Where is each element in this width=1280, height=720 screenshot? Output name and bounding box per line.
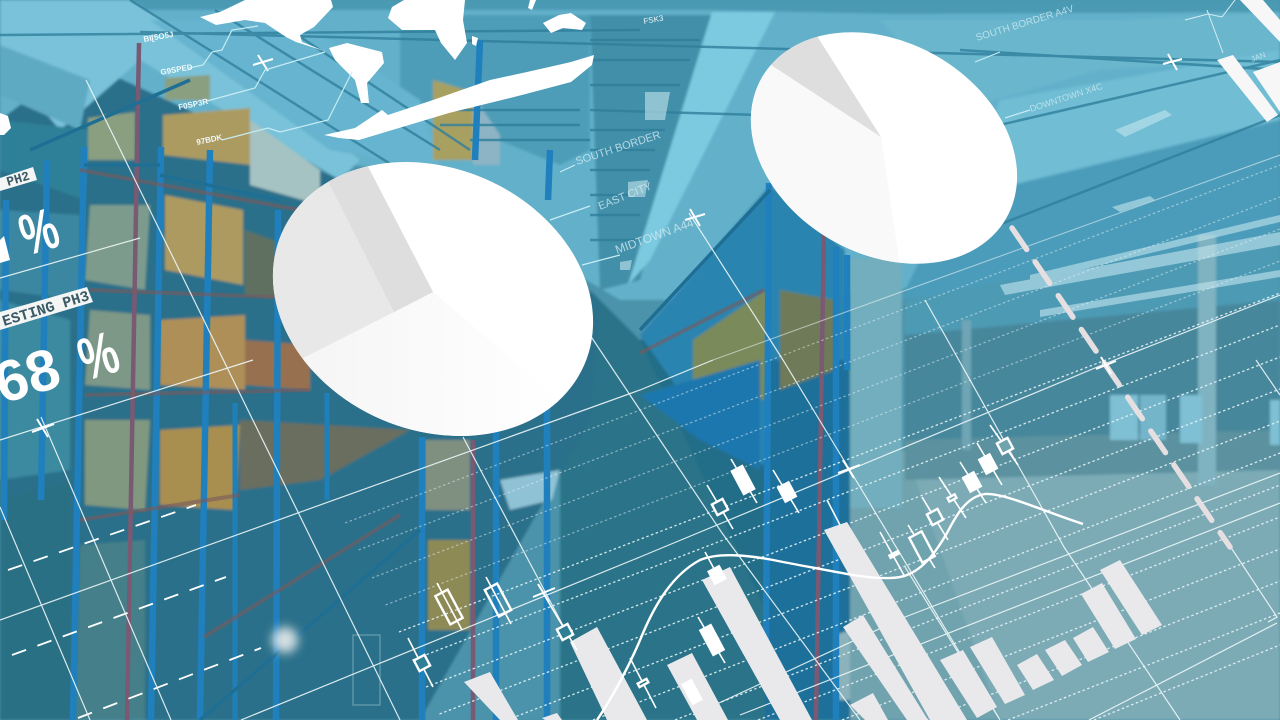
trend curve	[597, 494, 1083, 720]
area labels: SOUTH BORDER A4V	[975, 4, 1075, 44]
pie slice right pale	[750, 65, 900, 263]
partial digit	[0, 236, 10, 263]
solid grid line upper	[713, 155, 1280, 360]
cross markers	[32, 54, 1182, 602]
pie slice right dark	[771, 36, 881, 137]
pie chart left	[272, 162, 594, 436]
area labels: EAST CITY	[597, 180, 654, 213]
testing stat phase 3	[0, 287, 127, 416]
partial digit top	[0, 113, 11, 135]
pie slice left pale	[302, 338, 560, 436]
map labels: 97BDK	[196, 133, 223, 147]
dotted chart gridlines lower	[399, 293, 1280, 720]
pie chart right	[750, 32, 1018, 264]
madagascar	[472, 36, 478, 46]
glow spot	[272, 627, 298, 653]
north america	[200, 0, 333, 52]
dashed left lines	[8, 505, 261, 718]
dotted chart gridlines upper	[345, 165, 1280, 605]
map labels: G9SPED	[160, 62, 194, 77]
area labels: SOUTH BORDER	[574, 129, 662, 168]
south america	[329, 43, 384, 103]
testing stat phase 3: ESTING PH3	[0, 288, 92, 331]
bar chart	[464, 0, 1280, 720]
area labels: JAN	[1250, 50, 1267, 64]
percent sign: %	[71, 319, 127, 394]
asia fragments	[528, 0, 536, 10]
world map	[200, 0, 594, 140]
australia	[543, 13, 586, 33]
top right zigzag	[1185, 0, 1235, 53]
map labels: FSK3	[643, 14, 665, 26]
dashed pale trend line	[1012, 228, 1230, 547]
area labels: MIDTOWN A44	[613, 215, 696, 257]
testing stat phase 2	[0, 167, 66, 268]
percent sign: %	[12, 195, 66, 268]
warehouse rack uprights	[4, 40, 847, 720]
ceiling lights	[620, 92, 1280, 317]
ceiling stripes and lights	[0, 0, 1280, 240]
candlestick chart	[408, 425, 1018, 708]
testing stat phase 2: PH2	[5, 169, 32, 190]
antarctica	[324, 55, 594, 140]
area labels	[574, 4, 1267, 257]
floor marking outline	[353, 635, 380, 705]
africa	[388, 0, 467, 60]
map labels: BI[5O5J	[143, 30, 174, 44]
label tag	[0, 167, 37, 191]
map leaders	[189, 26, 1030, 265]
pie slice left dark	[328, 166, 433, 312]
map labels: F0SP3R	[178, 97, 209, 112]
pie slice left light	[272, 166, 394, 358]
map labels	[143, 14, 665, 147]
label tag	[0, 287, 93, 330]
area labels: DOWNTOWN X4C	[1029, 81, 1104, 114]
